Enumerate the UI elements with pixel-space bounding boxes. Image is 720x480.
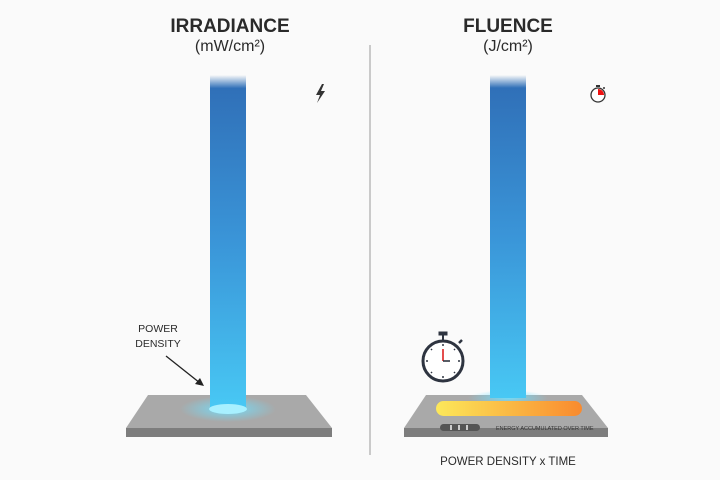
icon: small timer [591,85,605,102]
subtitle: irradiance units: (mW/cm²) [195,38,265,55]
arrow: power density [166,356,204,386]
label: power density x time: POWER DENSITY x TIME [440,456,576,468]
icon: stopwatch large [423,332,463,381]
beam: irradiance [210,75,246,408]
panel: irradiance plate [126,395,332,437]
spot: irradiance [209,404,247,414]
progress indicator [440,424,480,431]
label: power density [135,323,181,350]
subtitle: fluence units: (J/cm²) [483,38,533,55]
title: irradiance: IRRADIANCE [170,16,290,37]
label: power density: DENSITY [135,338,181,350]
title: fluence: FLUENCE [463,16,553,37]
heat bar [436,401,582,416]
icon: lightning [316,84,325,103]
label: energy accumulated: ENERGY ACCUMULATED OVER TIME [496,426,594,432]
divider [369,45,371,455]
panel: fluence plate [404,390,608,437]
label: power density: POWER [138,323,178,335]
beam: fluence [490,75,526,398]
